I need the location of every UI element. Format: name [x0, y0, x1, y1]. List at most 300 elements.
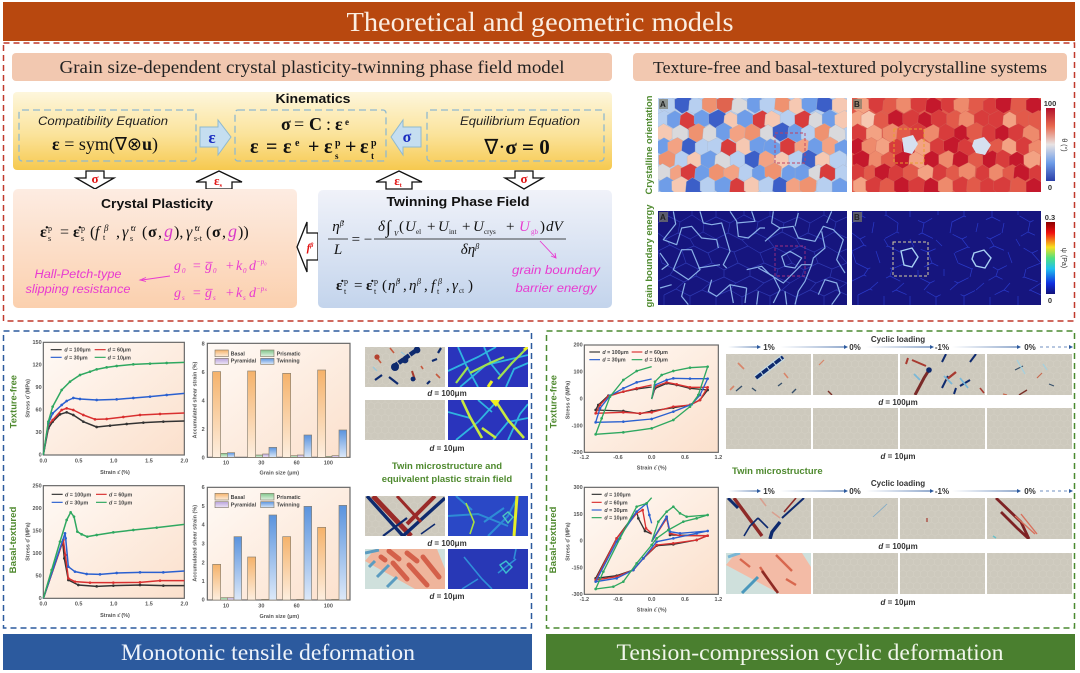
formula: twin strain rate: ε̇	[366, 278, 374, 294]
colorbar: orientation: θ (°)	[1060, 138, 1068, 152]
image: cyclic texture-free 100um strain -1%	[900, 354, 985, 395]
top title banner: Theoretical and geometric models	[346, 7, 734, 37]
formula: twin strain rate: t	[374, 287, 377, 296]
formula: twin strain rate: p	[374, 277, 378, 286]
colorbar: energy: ψ (Pa)	[1060, 248, 1067, 268]
chart: basal-textured cyclic stress-strain: d = 60μm	[604, 500, 628, 506]
formula: g0: 0	[213, 267, 217, 275]
chart: texture-free cyclic stress-strain: Stress σ̄ (MPa)	[565, 381, 571, 419]
panel: cyclic deformation frame	[546, 331, 1074, 628]
formula: slip strain rate: γ̇	[122, 224, 133, 241]
label: cyclic loading upper: Cyclic loading	[871, 335, 925, 344]
image: cyclic basal 100um strain 1%	[726, 498, 811, 539]
formula: phase field numerator: δ	[378, 219, 386, 235]
image: cyclic texture-free 100um final 0%	[987, 354, 1072, 395]
panel: twinning phase field	[318, 190, 612, 308]
image: strain field basal-textured 10um	[448, 549, 528, 589]
colorbar: orientation: 100	[1044, 99, 1056, 108]
arrow: twin strain up: ε	[394, 173, 400, 188]
formula: g0: g̅	[205, 259, 213, 274]
chart: basal-textured stress-strain: d = 60μm	[109, 492, 133, 498]
arrow: stress down to crystal plasticity	[76, 171, 114, 189]
formula: slip strain rate: α	[195, 223, 200, 233]
chart: texture-free cyclic stress-strain: -200	[572, 450, 583, 456]
chart: texture-free shear strain bars: 0	[202, 455, 205, 461]
formula: phase field numerator: U	[405, 219, 417, 235]
formula: slip strain rate: ,	[116, 224, 120, 241]
image: twin texture-free 100um	[365, 347, 445, 387]
formula: gs: g	[174, 286, 181, 301]
colorbar: orientation: 0	[1048, 183, 1052, 192]
image: cyclic texture-free 100um strain 1%	[726, 354, 811, 395]
image: cyclic basal 100um final 0%	[987, 498, 1072, 539]
panel: twinning phase field: barrier energy	[516, 283, 598, 295]
chart: basal-textured shear strain bars: Pyramidal	[231, 503, 257, 509]
arrow: twin volume fraction to crystal plasticity	[297, 222, 318, 272]
formula: slip strain rate: (	[90, 224, 95, 241]
formula: twin strain rate: (	[382, 278, 387, 294]
arrow: stress to constitutive: σ	[403, 129, 412, 146]
label: twin microstructure and equivalent plastic strain field	[382, 461, 512, 485]
chart: basal-textured shear strain bars: 30	[258, 604, 264, 610]
chart: basal-textured stress-strain: 0.0	[40, 602, 47, 608]
formula: slip strain rate: ))	[238, 224, 249, 241]
image: strain field basal-textured 100um	[448, 496, 528, 536]
chart: texture-free stress-strain: d = 100μm	[64, 348, 91, 354]
arrow: stress down to crystal plasticity: σ	[91, 171, 99, 186]
formula: twin strain rate: ε̇	[336, 278, 344, 294]
panel: kinematics: ε	[360, 136, 369, 158]
chart: basal-textured shear strain bars: 3	[202, 541, 205, 547]
panel: kinematics: ε	[283, 136, 292, 158]
label: d 10: d = 10μm	[430, 444, 464, 453]
panel: polycrystalline systems	[633, 53, 1068, 308]
formula: gs: k	[236, 286, 243, 301]
chart: texture-free cyclic stress-strain: -0.6	[613, 455, 623, 461]
panel: kinematics: ε	[335, 114, 343, 134]
chart: texture-free stress-strain: 1.5	[145, 458, 153, 464]
formula: twin strain rate: η̇	[388, 278, 400, 294]
chart: texture-free cyclic stress-strain: -100	[572, 423, 583, 429]
formula: phase field numerator: gb	[531, 228, 538, 236]
chart: basal-textured cyclic stress-strain: -150	[572, 565, 583, 571]
panel: crystal plasticity: Hall-Petch-type	[34, 269, 122, 281]
chart: basal-textured shear strain bars: 6	[202, 485, 205, 491]
formula: twin strain rate: η	[409, 278, 416, 294]
panel: kinematics: ∇·σ = 0	[483, 135, 550, 159]
chart: basal-textured cyclic stress-strain: -1.2	[580, 597, 589, 603]
map: grain boundary energy B: B	[854, 213, 860, 222]
panel: kinematics: p	[335, 138, 341, 149]
label: d 10 upper: d = 10μm	[881, 452, 915, 461]
chart: texture-free shear strain bars: Pyramidal	[231, 359, 257, 365]
panel: twinning phase field: Twinning Phase Field	[386, 194, 530, 209]
panel: twinning phase field: β	[339, 219, 344, 228]
formula: twin strain rate: t	[344, 287, 347, 296]
formula: twin strain rate: ,	[446, 278, 450, 294]
formula: g0: g	[174, 259, 181, 274]
panel: kinematics: e	[345, 117, 349, 127]
formula: g0: −p₀	[256, 258, 267, 266]
chart: basal-textured shear strain bars: 4	[202, 523, 206, 529]
formula: slip strain rate: p	[48, 224, 52, 233]
formula: phase field numerator: crys	[484, 228, 496, 236]
formula: slip strain rate: ,	[222, 224, 226, 241]
chart: texture-free stress-strain: 30	[36, 430, 42, 436]
chart: texture-free shear strain bars: 4	[202, 398, 206, 404]
chart: texture-free stress-strain: 150	[33, 340, 42, 346]
arrows: upper loading sequence: 0%	[1024, 343, 1036, 352]
image: strain field texture-free 10um	[448, 400, 528, 440]
formula: gs: =	[192, 286, 201, 301]
panel: kinematics: ε = sym(∇⊗u)	[52, 134, 158, 155]
panel: kinematics	[13, 92, 612, 170]
map: crystalline orientation A: A	[660, 100, 666, 109]
formula: phase field numerator: (	[399, 219, 404, 235]
chart: basal-textured shear strain bars: 10	[223, 604, 229, 610]
panel: cyclic twin microstructure	[726, 335, 1073, 607]
chart: texture-free stress-strain: Strain ε̄ (%)	[100, 470, 130, 476]
panel: twinning phase field: = −	[352, 232, 372, 248]
image: cyclic basal 100um strain -1%	[900, 498, 985, 539]
chart: basal-textured stress-strain: 150	[33, 528, 42, 534]
formula: phase field numerator: U	[519, 219, 531, 235]
chart: basal-textured cyclic stress-strain	[565, 485, 722, 614]
chart: basal-textured shear strain bars: 60	[294, 604, 300, 610]
formula: twin strain rate: β	[437, 277, 442, 286]
colorbar: energy: 0.3	[1045, 213, 1055, 222]
chart: texture-free cyclic stress-strain: Strain ε̄ (%)	[637, 466, 667, 472]
banner: tension-compression cyclic deformation: Tension-compression cyclic deformation	[616, 640, 1004, 665]
label: texture-free: Texture-free	[9, 375, 19, 428]
formula: gs: +	[225, 286, 234, 301]
colorbar: orientation	[1044, 99, 1068, 192]
formula: slip strain rate: γ̇	[186, 224, 197, 241]
panel: kinematics: p	[371, 138, 377, 149]
formula: phase field numerator: V	[394, 230, 399, 238]
formula: phase field numerator: int	[449, 228, 456, 236]
image: twin basal-textured 10um	[365, 549, 445, 589]
chart: texture-free stress-strain: 90	[36, 385, 42, 391]
panel: kinematics: =	[294, 114, 304, 134]
formula: slip strain rate: f	[95, 224, 102, 241]
chart: basal-textured stress-strain: 200	[33, 506, 42, 512]
chart: basal-textured stress-strain: d = 10μm	[109, 500, 133, 506]
chart: basal-textured cyclic stress-strain: -300	[572, 592, 583, 598]
formula: slip strain rate: (	[142, 224, 147, 241]
chart: basal-textured shear strain bars: 1	[202, 579, 205, 585]
chart: texture-free stress-strain: d = 10μm	[108, 355, 131, 361]
image: cyclic basal 10um strain 1%	[726, 553, 811, 594]
chart: basal-textured shear strain bars: Twinning	[277, 503, 300, 509]
formula: slip strain rate: s-t	[194, 234, 203, 243]
formula: gs: s	[182, 294, 185, 302]
arrow: slip strain up: s	[220, 183, 223, 189]
panel: twinning phase field: η̇	[332, 219, 340, 235]
formula: slip strain rate: g	[228, 221, 237, 241]
panel: cyclic charts	[548, 343, 722, 614]
chart: basal-textured stress-strain: 0	[39, 596, 42, 602]
panel: theoretical and geometric models frame	[4, 43, 1074, 321]
panel: kinematics: =	[266, 136, 277, 158]
formula: slip strain rate: σ	[148, 224, 157, 241]
chart: texture-free stress-strain: 1.0	[110, 458, 117, 464]
label: d 100: d = 100μm	[427, 389, 467, 398]
formula: twin strain rate: t	[437, 287, 440, 296]
chart: texture-free cyclic stress-strain: 1.2	[715, 455, 722, 461]
panel: kinematics: Compatibility Equation	[38, 116, 168, 128]
arrows: upper loading sequence: -1%	[935, 343, 949, 352]
formula: gs: s	[213, 294, 216, 302]
chart: texture-free shear strain bars: 100	[324, 460, 333, 466]
arrows: lower loading sequence: 0%	[849, 487, 861, 496]
arrows: lower loading sequence: 1%	[763, 487, 775, 496]
chart: texture-free stress-strain: d = 60μm	[108, 348, 131, 354]
label: d 100 upper: d = 100μm	[878, 398, 918, 407]
chart: basal-textured stress-strain	[25, 483, 188, 619]
arrow: slip strain up	[196, 171, 242, 189]
arrows: upper loading sequence: 0%	[849, 343, 861, 352]
chart: texture-free stress-strain: 0	[39, 453, 42, 459]
arrow: twin volume fraction to crystal plasticity: f	[307, 242, 310, 254]
formula: phase field numerator: U	[438, 219, 450, 235]
chart: basal-textured cyclic stress-strain: 0	[580, 539, 583, 545]
panel: crystal plasticity-twinning phase field model	[12, 53, 612, 308]
formula: phase field numerator: +	[506, 219, 514, 235]
formula: slip strain rate: p	[81, 224, 85, 233]
panel: twinning phase field: grain boundary	[512, 265, 601, 277]
banner: monotonic tensile deformation: Monotonic tensile deformation	[121, 640, 416, 665]
chart: texture-free shear strain bars: 60	[294, 460, 300, 466]
heading: model title	[12, 53, 612, 81]
chart: texture-free stress-strain: 0.0	[40, 458, 47, 464]
formula: slip strain rate: ),	[174, 224, 183, 241]
panel: monotonic twin and strain fields	[365, 347, 528, 601]
formula: twin strain rate: ct	[459, 287, 464, 295]
formula: slip strain rate: =	[60, 224, 69, 241]
chart: basal-textured cyclic stress-strain: Stress σ̄ (MPa)	[565, 522, 571, 561]
formula: slip strain rate: g	[164, 221, 173, 241]
label: crystalline orientation: Crystalline orientation	[644, 95, 655, 194]
arrow: slip strain up: ε	[214, 173, 220, 188]
arrow: strain to constitutive: ε	[208, 128, 216, 147]
formula: twin strain rate: )	[468, 278, 473, 294]
panel: kinematics: C	[309, 114, 322, 134]
chart: basal-textured shear strain bars: 5	[202, 504, 205, 510]
map: crystalline orientation B	[852, 98, 1041, 192]
chart: texture-free shear strain bars: Twinning	[277, 359, 300, 365]
panel: kinematics: Kinematics	[276, 92, 351, 106]
image: cyclic texture-free 100um strain 0%	[813, 354, 898, 395]
chart: texture-free cyclic stress-strain	[565, 343, 722, 472]
formula: phase field numerator: ∫	[385, 217, 392, 238]
formula: phase field numerator: +	[427, 219, 435, 235]
heading: model title: Grain size-dependent crystal plasticity-twinning phase field model	[60, 57, 564, 77]
map: crystalline orientation B: B	[854, 100, 860, 109]
arrow: twin strain up	[376, 171, 422, 189]
chart: basal-textured stress-strain: 50	[36, 573, 42, 579]
panel: twinning phase field: δη	[461, 242, 475, 258]
formula: twin strain rate: β	[395, 277, 400, 286]
label: d 100 lower: d = 100μm	[878, 542, 918, 551]
arrows: lower loading sequence: -1%	[935, 487, 949, 496]
chart: texture-free stress-strain: 0.5	[75, 458, 82, 464]
chart: texture-free stress-strain: Stress σ̄ (MPa)	[25, 379, 31, 418]
arrows: upper loading sequence: 1%	[763, 343, 775, 352]
formula: slip strain rate: α	[131, 223, 136, 233]
formula: g0: 0	[182, 267, 186, 275]
chart: basal-textured shear strain bars: Prismatic	[277, 495, 301, 501]
map: grain boundary energy B	[852, 211, 1041, 305]
arrow: strain to constitutive	[200, 120, 231, 155]
chart: basal-textured stress-strain: 250	[33, 483, 42, 489]
map: grain boundary energy A: A	[660, 213, 666, 222]
chart: basal-textured shear strain bars: Accumulated shear strain (%)	[192, 505, 198, 582]
chart: basal-textured stress-strain: 1.0	[110, 602, 117, 608]
heading: polycrystalline systems title	[633, 53, 1067, 81]
formula: phase field numerator: U	[473, 219, 485, 235]
panel: crystal plasticity	[13, 189, 297, 308]
formula: g0: d	[249, 259, 257, 274]
chart: texture-free shear strain bars: Accumulated shear strain (%)	[192, 361, 198, 438]
panel: monotonic charts	[8, 340, 350, 620]
chart: basal-textured cyclic stress-strain: d = 100μm	[604, 492, 631, 498]
formula: slip strain rate: (	[206, 224, 211, 241]
label: grain boundary energy: grain boundary energy	[644, 204, 655, 308]
chart: basal-textured shear strain bars: 0	[202, 598, 205, 604]
chart: texture-free cyclic stress-strain: 0	[580, 396, 583, 402]
chart: basal-textured cyclic stress-strain: d = 30μm	[604, 508, 628, 514]
formula: slip strain rate: s	[130, 234, 133, 243]
label: basal-textured: Basal-textured	[548, 506, 558, 573]
arrow: stress to constitutive	[391, 120, 421, 155]
chart: texture-free cyclic stress-strain: 100	[574, 370, 583, 376]
chart: basal-textured cyclic stress-strain: -0.6	[613, 597, 623, 603]
heading: polycrystalline systems title: Texture-free and basal-textured polycrystalline systems	[653, 58, 1047, 77]
chart: texture-free cyclic stress-strain: d = 100μm	[602, 350, 629, 356]
map: grain boundary energy A	[658, 211, 847, 305]
chart: texture-free cyclic stress-strain: 0.0	[648, 455, 655, 461]
arrow: twin strain up: t	[400, 183, 402, 189]
chart: basal-textured stress-strain: d = 30μm	[65, 500, 89, 506]
top title banner	[3, 2, 1075, 41]
chart: basal-textured shear strain bars	[192, 485, 350, 620]
chart: basal-textured stress-strain: 0.5	[75, 602, 82, 608]
panel: crystal plasticity: slipping resistance	[26, 284, 130, 296]
chart: texture-free cyclic stress-strain: d = 60μm	[645, 350, 668, 356]
label: d 10 lower: d = 10μm	[881, 598, 915, 607]
label: basal-textured: Basal-textured	[8, 506, 18, 573]
formula: slip strain rate: s	[48, 234, 51, 243]
chart: texture-free cyclic stress-strain: d = 10μm	[645, 358, 668, 364]
formula: gs: s	[243, 294, 246, 302]
formula: slip strain rate: ε̇	[73, 224, 82, 241]
panel: kinematics: +	[308, 136, 319, 158]
panel: kinematics: t	[371, 151, 374, 161]
chart: texture-free shear strain bars: 8	[202, 342, 205, 348]
panel: kinematics: s	[335, 151, 339, 161]
panel: kinematics: +	[345, 136, 356, 158]
formula: slip strain rate: ,	[158, 224, 162, 241]
chart: basal-textured shear strain bars: Basal	[231, 495, 245, 501]
formula: phase field numerator: +	[462, 219, 470, 235]
label: texture-free: Texture-free	[549, 375, 559, 428]
panel: kinematics: Equilibrium Equation	[460, 116, 580, 128]
formula: slip strain rate: σ	[212, 224, 221, 241]
arrows: upper loading sequence	[728, 343, 1073, 352]
chart: basal-textured shear strain bars: 100	[324, 604, 333, 610]
colorbar: energy	[1045, 213, 1067, 305]
formula: g0: k	[236, 259, 243, 274]
formula: slip strain rate: s	[81, 234, 84, 243]
chart: texture-free stress-strain: 60	[36, 408, 42, 414]
chart: texture-free shear strain bars: 10	[223, 460, 229, 466]
chart: basal-textured cyclic stress-strain: Strain ε̄ (%)	[637, 608, 667, 614]
label: d 10: d = 10μm	[430, 592, 464, 601]
chart: basal-textured shear strain bars: Grain size (μm)	[260, 614, 299, 620]
chart: basal-textured stress-strain: Stress σ̄ (MPa)	[25, 522, 31, 561]
formula: twin strain rate: ,	[403, 278, 407, 294]
chart: basal-textured shear strain bars: 2	[202, 560, 205, 566]
formula: slip strain rate: ε̇	[40, 224, 49, 241]
image: cyclic basal 100um strain 0%	[813, 498, 898, 539]
chart: texture-free cyclic stress-strain: 0.6	[681, 455, 689, 461]
panel: kinematics: e	[295, 138, 300, 149]
chart: texture-free cyclic stress-strain: 200	[574, 343, 583, 349]
formula: gs: −pₛ	[256, 285, 267, 293]
formula: phase field numerator: )	[540, 219, 545, 235]
chart: texture-free shear strain bars: 30	[258, 460, 264, 466]
chart: texture-free stress-strain: d = 30μm	[64, 355, 88, 361]
formula: phase field numerator: dV	[546, 219, 564, 235]
chart: texture-free stress-strain	[25, 340, 188, 476]
panel: twinning phase field: β	[474, 242, 479, 251]
chart: texture-free cyclic stress-strain: -1.2	[580, 455, 589, 461]
chart: texture-free shear strain bars: Basal	[231, 351, 245, 357]
arrows: lower loading sequence: 0%	[1024, 487, 1036, 496]
panel: kinematics: ε	[250, 136, 259, 158]
image: twin basal-textured 100um	[365, 496, 445, 536]
label: twin microstructure and equivalent plastic strain field: equivalent plastic strain field	[382, 474, 512, 485]
chart: texture-free shear strain bars: Prismatic	[277, 351, 301, 357]
formula: g0: =	[192, 259, 201, 274]
banner: tension-compression cyclic deformation	[546, 634, 1075, 670]
chart: basal-textured stress-strain: Strain ε̄ (%)	[100, 613, 130, 619]
label: twin microstructure: Twin microstructure	[732, 466, 823, 477]
label: twin microstructure and equivalent plastic strain field: Twin microstructure and	[392, 461, 502, 472]
chart: basal-textured cyclic stress-strain: 1.2	[715, 597, 722, 603]
map: crystalline orientation A	[658, 98, 847, 192]
chart: texture-free stress-strain: 2.0	[181, 458, 188, 464]
arrow: stress down to twinning: σ	[520, 171, 528, 186]
formula: twin strain rate: f	[431, 278, 437, 294]
chart: texture-free cyclic stress-strain: d = 30μm	[602, 358, 626, 364]
formula: twin strain rate: γ	[452, 278, 459, 294]
arrow: stress down to twinning	[505, 171, 543, 189]
panel: kinematics: σ	[281, 114, 291, 134]
formula: slip strain rate: β	[103, 223, 109, 233]
chart: texture-free stress-strain: 120	[33, 363, 42, 369]
label: d 100: d = 100μm	[427, 539, 467, 548]
arrows: lower loading sequence	[728, 487, 1073, 496]
image: strain field texture-free 100um	[448, 347, 528, 387]
label: cyclic loading lower: Cyclic loading	[871, 479, 925, 488]
colorbar: energy: 0	[1048, 296, 1052, 305]
chart: texture-free shear strain bars: Grain size (μm)	[260, 471, 299, 477]
panel: kinematics: :	[326, 114, 331, 134]
chart: basal-textured stress-strain: 100	[33, 551, 42, 557]
chart: basal-textured cyclic stress-strain: 300	[574, 485, 583, 491]
